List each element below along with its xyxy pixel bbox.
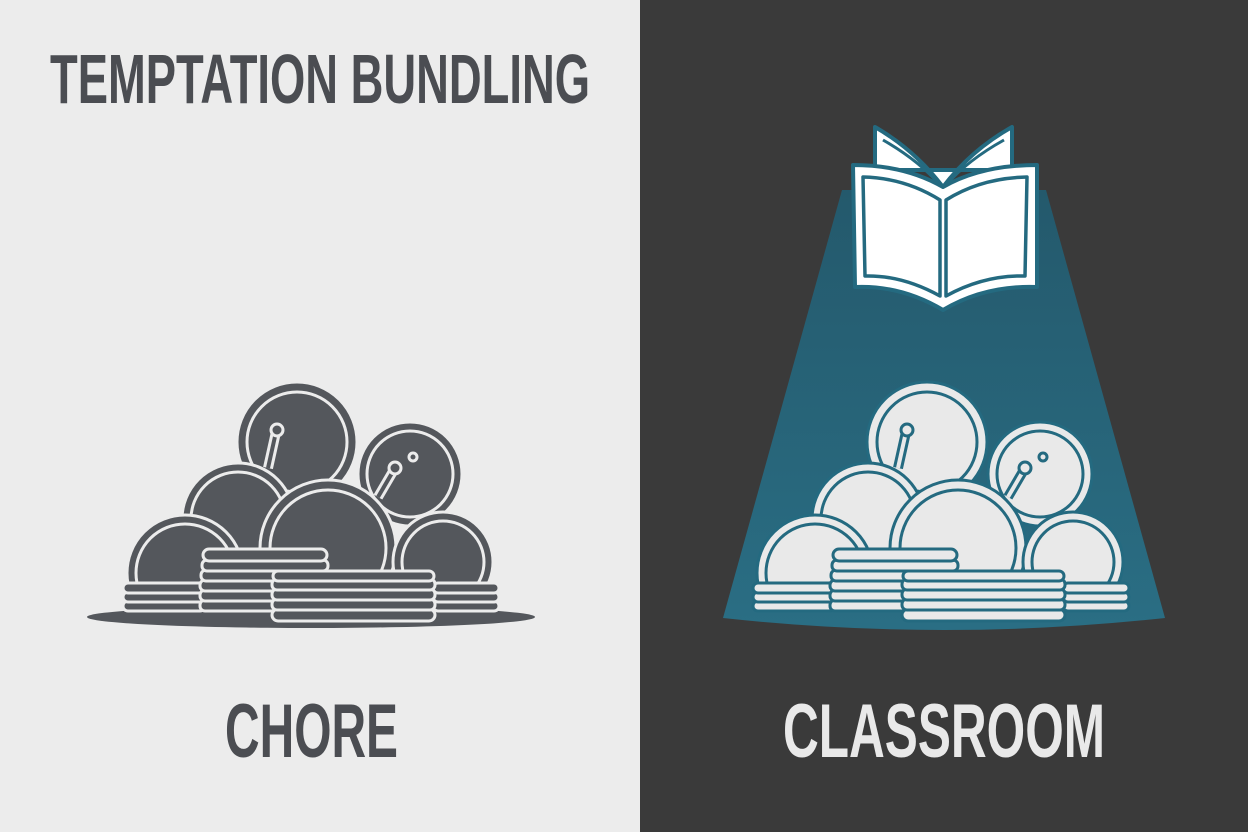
- spotlight beam: [723, 190, 1165, 630]
- panel: left light background: [0, 0, 640, 832]
- icon: dishes pile in spotlight: [753, 382, 1129, 631]
- label: chore: CHORE: [225, 689, 398, 774]
- icon: open book: [853, 127, 1037, 310]
- icon: dirty dishes pile (chore): [123, 382, 499, 631]
- shadow: left plate base: [87, 606, 535, 628]
- panel: right dark background: [640, 0, 1248, 832]
- title: TEMPTATION BUNDLING: [50, 40, 590, 118]
